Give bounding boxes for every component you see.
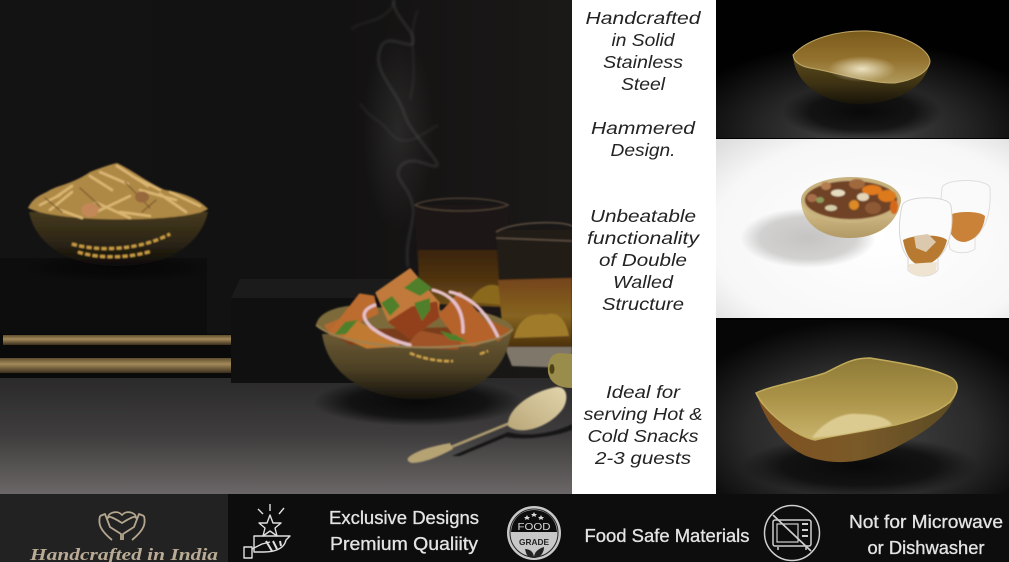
olive [548,353,572,388]
rim [316,325,513,347]
bowl outer [793,55,930,104]
text: ideal for serving: 2-3 guests [594,448,691,468]
text: handcrafted in solid stainless steel [586,8,702,94]
brass spoon [408,387,566,463]
hammered highlight [410,351,488,361]
panel: bottom badge strip [0,494,1009,562]
coriander leaves [334,277,468,342]
text: exclusive designs premium quality: Exclusive Designs [329,508,479,528]
text: double walled structure [587,206,701,314]
hammered highlight [72,234,170,257]
left bowl shadow [23,254,213,282]
paneer pieces [326,270,508,348]
bowl highlight [828,56,896,82]
bowl shadow [782,84,942,140]
text: double walled structure: Structure [602,294,684,314]
icon: hands holding heart [99,512,145,540]
bowl inner [793,31,930,83]
center bowl shadow [313,378,523,426]
badge: handcrafted in india [0,494,228,562]
text: double walled structure: Walled [613,272,674,292]
panel: bottom right bowl photo [716,320,1009,496]
bowl shadow [742,436,978,496]
text: not for microwave or dishwasher: Not for Microwave [849,512,1003,532]
text: hammered design [591,118,697,160]
text: not for microwave or dishwasher [849,512,1003,558]
bowl inside [756,358,957,440]
glass front [900,198,952,276]
mixed nuts [805,179,898,219]
panel: feature text column [572,0,716,494]
table surface [0,378,572,494]
text: not for microwave or dishwasher: or Dishwasher [868,538,984,558]
whisky glass front [496,223,572,368]
text: exclusive designs premium quality: Premium Qualiity [330,534,478,554]
icon: star on serving tray [244,504,290,558]
spoon shadow [452,424,572,456]
text: double walled structure: of Double [599,250,687,270]
bowl outside [758,392,957,462]
text: hammered design: Design. [610,140,676,160]
panel: main lifestyle photo [0,0,572,494]
lower shelf [0,334,231,378]
center bowl with paneer [316,270,513,399]
text: ideal for serving [584,382,702,468]
icon: food grade badge: GRADE [519,537,549,547]
whisky glass back [415,198,508,313]
bowl reflection [812,414,892,438]
icon: no microwave [764,506,820,560]
text: handcrafted in solid stainless steel: Handcrafted [586,8,702,28]
bowl shadow [740,208,876,268]
text: exclusive designs premium quality [329,508,479,554]
panel: top right bowl photo [716,0,1009,140]
right stand block [231,279,395,383]
brass rods [0,335,231,373]
text: handcrafted in solid stainless steel: in Solid [612,30,676,50]
onion rings [364,290,498,345]
text: double walled structure: functionality [587,228,701,248]
text: handcrafted in solid stainless steel: Stainless [603,52,683,72]
icon: food grade badge [507,506,561,560]
glass back [941,180,990,253]
text: double walled structure: Unbeatable [590,206,696,226]
text: food safe materials: Food Safe Materials [584,526,750,546]
text: handcrafted in solid stainless steel: Steel [621,74,666,94]
smoke [352,0,438,267]
bowl [801,200,901,238]
left stand block [0,258,207,334]
text: ideal for serving: serving Hot & [584,404,702,424]
text: hammered design: Hammered [591,118,697,138]
text: ideal for serving: Cold Snacks [588,426,699,446]
text: ideal for serving: Ideal for [606,382,681,402]
left bowl with snack mix [28,163,208,266]
icon: food grade badge: FOOD [518,521,551,533]
panel: middle nuts bowl photo [716,139,1009,318]
